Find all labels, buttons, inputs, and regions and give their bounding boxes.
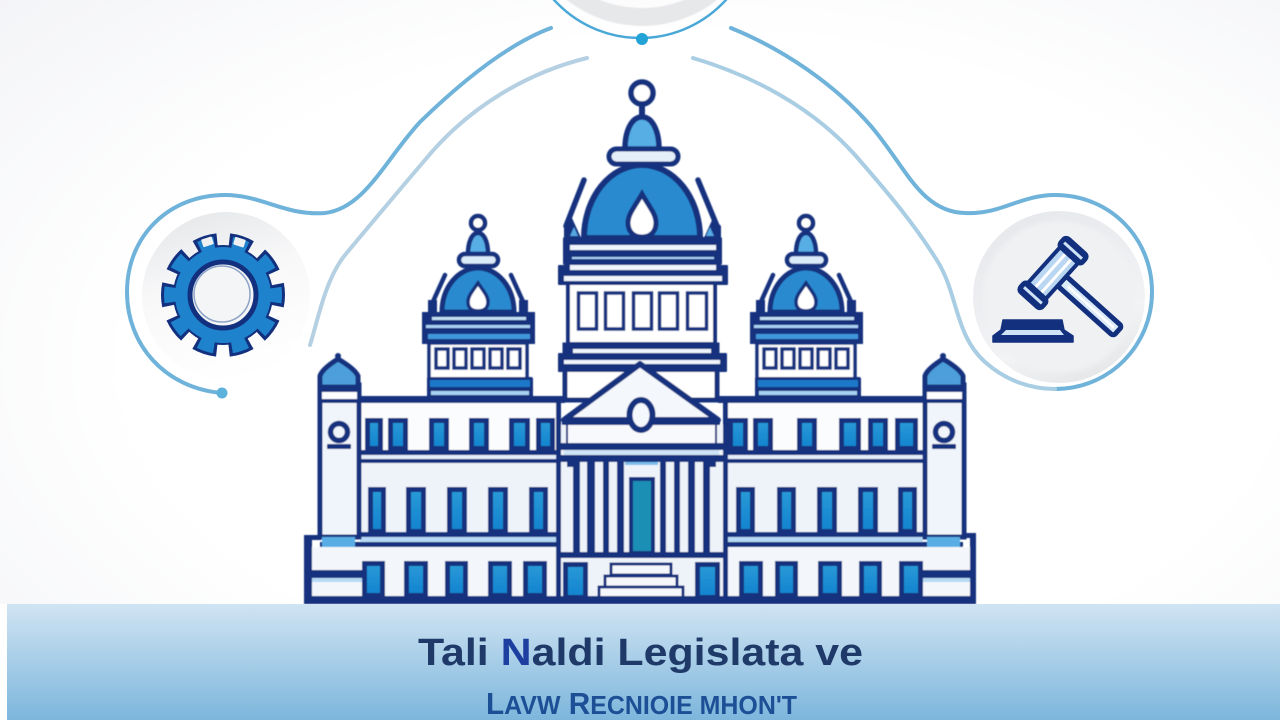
left wing windows	[364, 420, 552, 596]
central portico	[556, 364, 728, 600]
icon: connector end dot	[216, 388, 228, 398]
connector: top circle node	[521, 0, 763, 45]
right tower	[925, 353, 964, 547]
banner subtitle: LAVW RECNIOIE MHON'T	[486, 686, 797, 720]
left tower	[320, 353, 359, 547]
building: parliament illustration	[304, 82, 976, 604]
connector: inner left curve	[310, 58, 587, 345]
connector: outer right curve and ring around gavel	[731, 28, 1152, 389]
icon: gavel node	[973, 211, 1145, 383]
lower doors	[566, 564, 586, 598]
main door	[631, 479, 653, 553]
right wing windows	[730, 420, 920, 596]
right wing	[718, 396, 976, 603]
building base line	[304, 596, 976, 604]
left small dome	[422, 216, 535, 399]
gavel base	[993, 320, 1073, 342]
footer banner	[0, 604, 1280, 720]
left wing	[304, 396, 565, 603]
gavel hammer	[1015, 233, 1143, 359]
connector: inner right curve joining gavel ring	[693, 58, 1055, 389]
connector: outer left curve and ring around gear	[127, 28, 551, 393]
right small dome	[750, 216, 863, 399]
central dome	[558, 82, 728, 400]
steps	[599, 564, 683, 598]
banner title: Tali Naldi Legislata ve	[418, 632, 863, 674]
icon: gear node	[142, 212, 310, 380]
